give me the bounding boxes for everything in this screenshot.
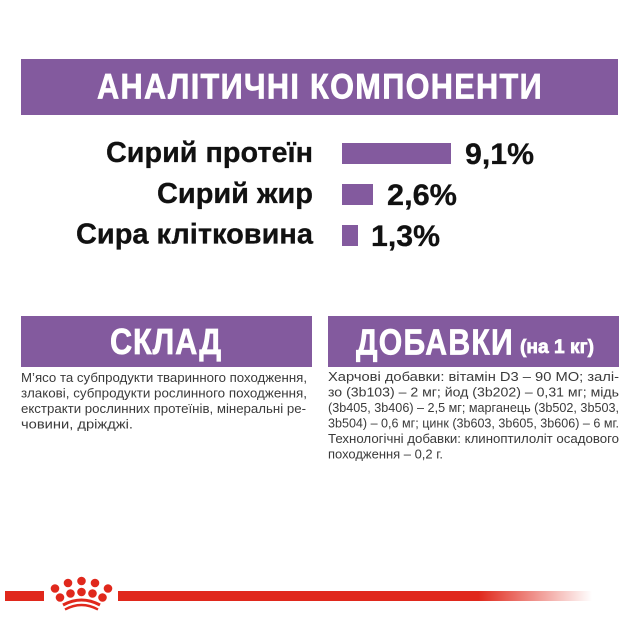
text block: additives: зо (3b103) – 2 мг; йод (3b202) – 0,31 мг; мідь <box>328 384 619 400</box>
panel: analytical components header <box>21 59 618 115</box>
text block: additives <box>328 369 619 462</box>
title: АНАЛІТИЧНІ КОМПОНЕНТИ <box>97 68 543 106</box>
icon: royal canin crown <box>51 577 112 610</box>
text block: composition: човини, дріжджі. <box>21 416 133 432</box>
text block: additives: Технологічні добавки: клиноптилоліт осадового <box>328 431 619 446</box>
row: crude fibre <box>76 218 440 253</box>
panel: composition <box>21 316 312 432</box>
row: crude fat <box>157 178 457 212</box>
heading: composition: СКЛАД <box>110 321 222 362</box>
bar chart: analytical components <box>76 137 534 253</box>
text block: composition <box>21 370 307 432</box>
text block: additives: 3b504) – 0,6 мг; цинк (3b603, 3b605, 3b606) – 6 мг. <box>328 416 619 430</box>
text block: additives: походження – 0,2 г. <box>328 446 443 462</box>
text block: additives: (3b405, 3b406) – 2,5 мг; марганець (3b502, 3b503, <box>328 400 619 415</box>
row: crude fat: 2,6% <box>387 179 457 212</box>
heading: additives: ДОБАВКИ <box>356 322 514 362</box>
text block: additives: Харчові добавки: вітамін D3 – 90 МО; залі- <box>328 369 619 384</box>
text block: composition: М’ясо та субпродукти тваринного походження, <box>21 370 307 385</box>
row: crude protein <box>106 137 534 171</box>
row: crude fibre: 1,3% <box>371 220 440 253</box>
footer: red band right fading <box>118 591 592 601</box>
panel: additives <box>328 316 619 462</box>
text block: composition: екстракти рослинних протеїнів, мінеральні ре- <box>21 401 306 416</box>
footer: red band left <box>5 591 44 601</box>
row: crude protein: 9,1% <box>465 138 534 171</box>
text block: composition: злакові, субпродукти рослинного походження, <box>21 386 307 400</box>
heading: additives: (на 1 кг) <box>520 337 594 358</box>
row: crude fat: Сирий жир <box>157 178 313 210</box>
row: crude fibre: Сира клітковина <box>76 218 314 250</box>
row: crude protein: Сирий протеїн <box>106 137 313 169</box>
